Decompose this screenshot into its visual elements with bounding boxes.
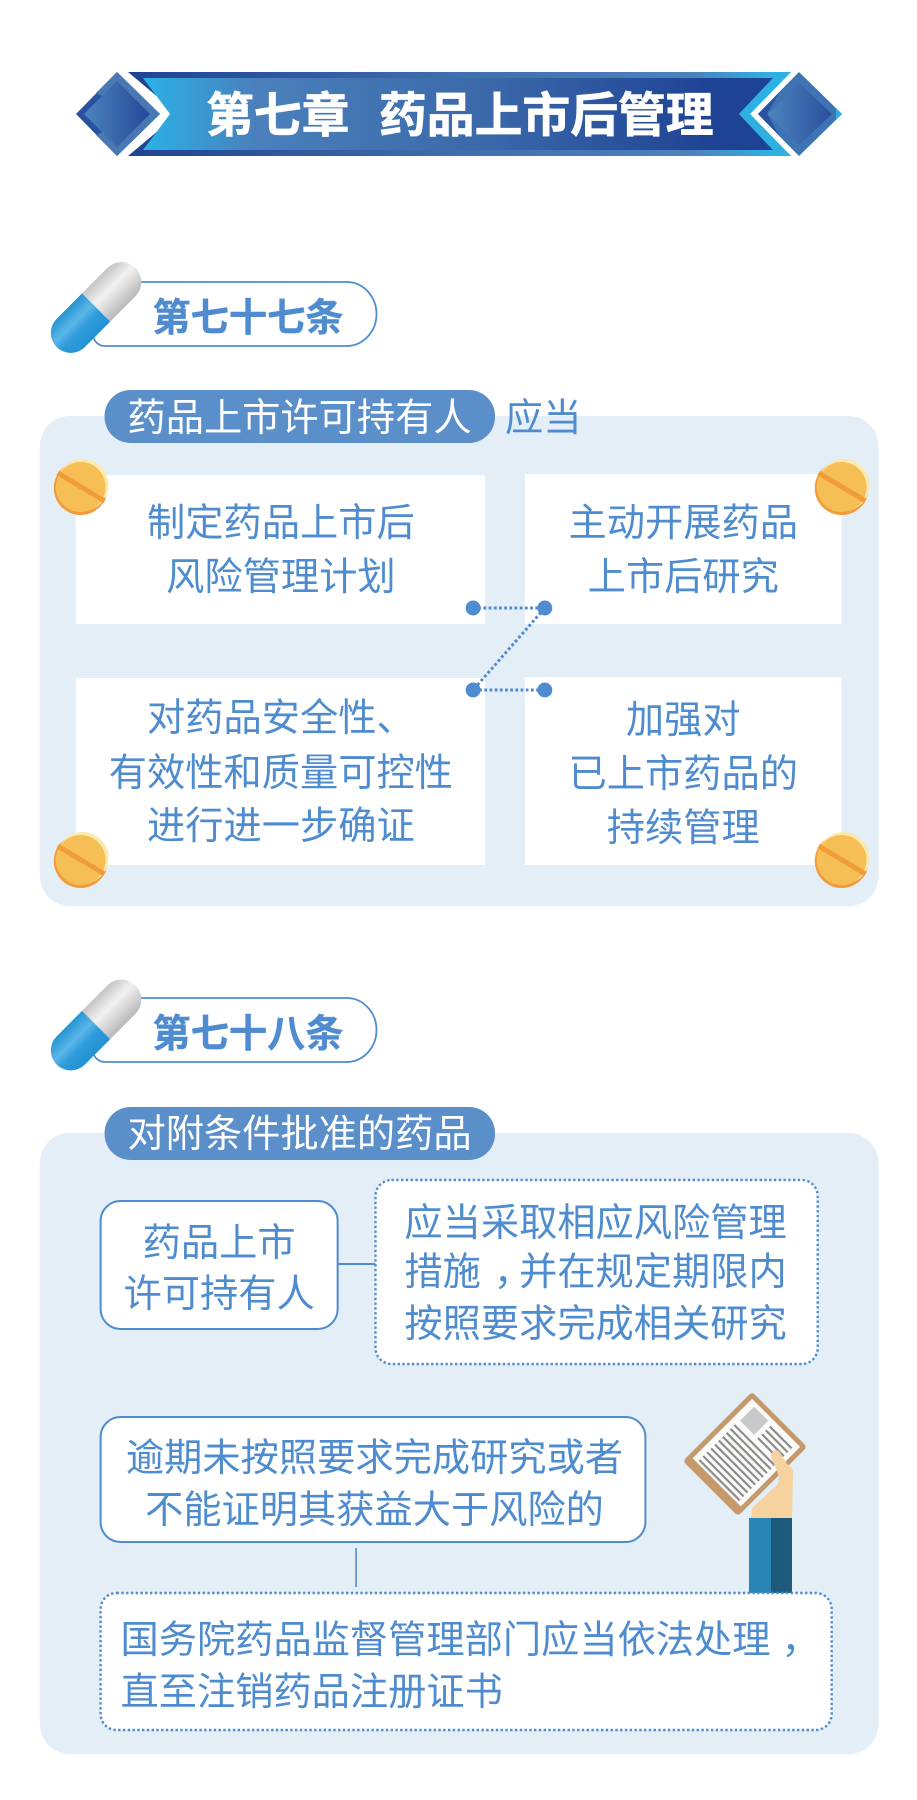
icon: left diamond [76,72,160,156]
card: risk plan [76,475,485,624]
card: continuing management: 已上市药品的 [569,753,798,796]
box: required measures: 按照要求完成相关研究 [404,1303,787,1346]
subject pill: 药品上市许可持有人 [127,397,472,440]
text: should: 应当 [505,397,581,440]
icon: tablet top left [54,459,109,515]
box: regulator action: 国务院药品监督管理部门应当依法处理 ， [121,1619,820,1662]
icon: right diamond [758,72,842,156]
page content [40,254,878,1754]
section heading: article 78 [43,971,376,1079]
icon: capsule [43,971,150,1079]
panel: article 78 [40,1107,878,1754]
heading outline [94,998,376,1062]
hand [751,1450,793,1518]
box: license holder: 许可持有人 [124,1273,315,1316]
heading text: 第七十八条 [152,1013,344,1056]
card: continuing management: 持续管理 [607,807,760,850]
card: post-market research: 上市后研究 [588,556,779,599]
card: continuing management: 加强对 [626,699,741,742]
box: overdue condition: 逾期未按照要求完成研究或者 [126,1437,623,1480]
box: overdue condition [101,1417,645,1542]
box: license holder [101,1201,338,1329]
box: required measures: 应当采取相应风险管理 [404,1202,787,1245]
title text: 第七章 [206,90,349,143]
card: risk plan: 风险管理计划 [166,556,396,599]
box: required measures: 措施 ，并在规定期限内 [404,1251,787,1294]
icon: capsule [43,254,150,361]
icon: tablet top right [815,459,870,515]
icon: tablet bottom right [815,832,870,888]
icon: hand holding document [683,1392,807,1594]
panel background [40,1133,878,1754]
card: further confirmation: 进行进一步确证 [147,805,415,848]
subject pill: 对附条件批准的药品 [127,1113,472,1156]
card: post-market research: 主动开展药品 [569,502,798,545]
connector line [355,1548,357,1587]
panel: article 77 [40,390,878,906]
heading text: 第七十七条 [152,297,344,340]
card: further confirmation [76,678,485,865]
box: required measures [375,1180,818,1364]
icon: tablet bottom left [54,832,109,888]
box: license holder: 药品上市 [143,1222,296,1265]
heading outline [94,282,376,346]
card: continuing management [525,677,842,865]
ribbon [128,72,791,156]
box: regulator action [101,1593,832,1730]
card: further confirmation: 有效性和质量可控性 [109,752,453,795]
connector line [338,1263,375,1265]
title text: chapter name: 药品上市后管理 [379,90,714,143]
card: post-market research [525,474,842,624]
title banner [76,72,842,156]
section heading: article 77 [43,254,376,361]
sleeve [749,1518,792,1594]
box: overdue condition: 不能证明其获益大于风险的 [145,1489,604,1532]
dotted connector [466,600,552,698]
panel background [40,416,878,906]
box: regulator action: 直至注销药品注册证书 [121,1671,503,1714]
card: risk plan: 制定药品上市后 [147,502,415,545]
document [683,1392,807,1516]
card: further confirmation: 对药品安全性、 [147,697,415,740]
